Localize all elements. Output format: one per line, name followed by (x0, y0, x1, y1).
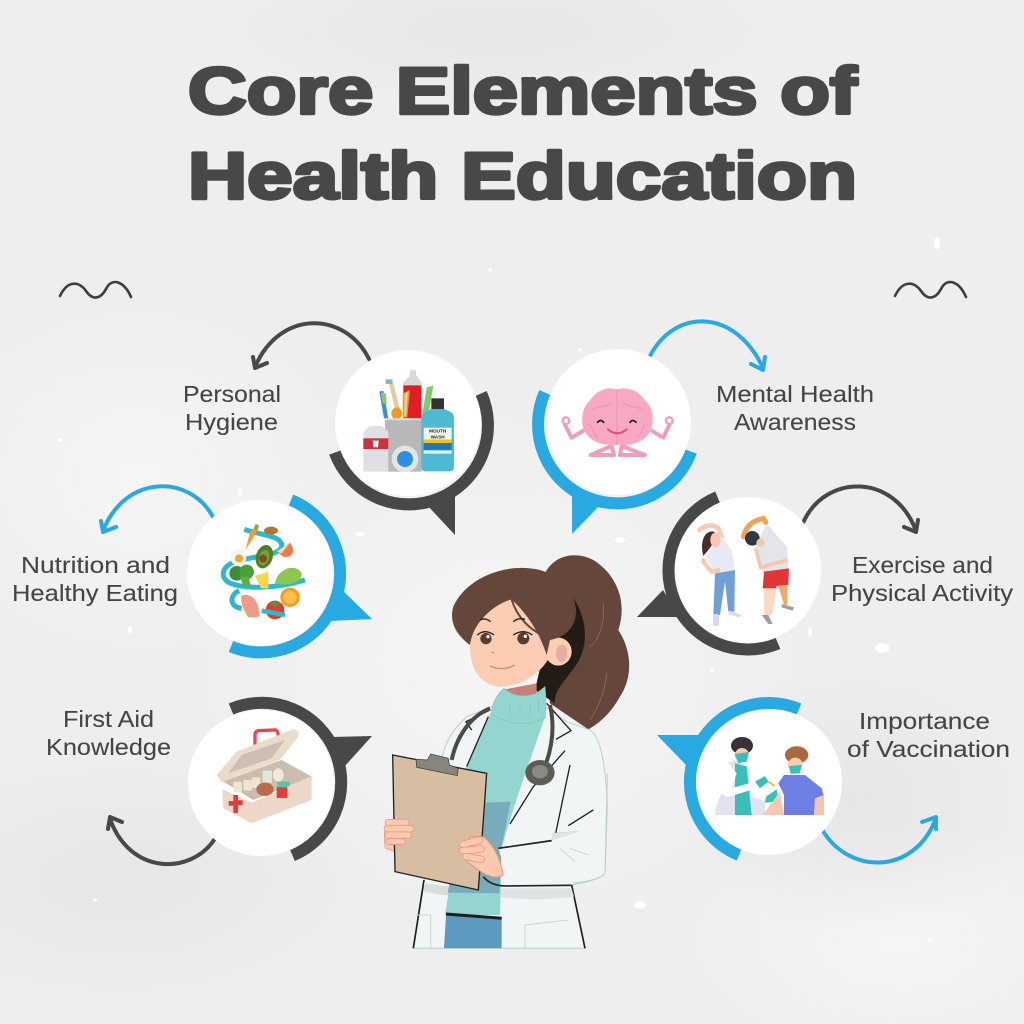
labels: Importance (859, 708, 990, 734)
arrow: personal hygiene (253, 323, 369, 368)
icon: meditating brain (563, 388, 673, 455)
labels: Healthy Eating (12, 580, 178, 606)
arrow: mental health (650, 321, 765, 370)
icon: first aid kit (217, 729, 312, 823)
icon: healthy food (223, 524, 305, 619)
labels (12, 381, 1014, 762)
panel: mental health bubble (538, 349, 691, 534)
arrow: vaccination (823, 817, 936, 863)
ponytail (543, 555, 629, 729)
panel: first aid bubble (188, 703, 372, 856)
panel: vaccination bubble (657, 703, 842, 855)
face (470, 598, 553, 687)
icon: hygiene products: WASH (431, 434, 445, 439)
coat lapels (502, 703, 593, 848)
labels: Exercise and (852, 552, 993, 578)
title (188, 53, 858, 212)
labels: Nutrition and (21, 552, 170, 578)
arrow: first aid (108, 817, 214, 864)
labels: Mental Health (716, 381, 874, 407)
icon: stretching people (699, 518, 794, 626)
labels: of Vaccination (847, 736, 1010, 762)
labels: Personal (183, 381, 281, 407)
labels: Awareness (734, 409, 856, 435)
hand right (467, 837, 503, 877)
fingers left (384, 819, 414, 845)
doctor illustration (384, 555, 629, 948)
turtleneck and neck (502, 683, 537, 700)
icon: hygiene products (363, 371, 454, 472)
icon: vaccination (715, 737, 824, 815)
coat shadow (424, 883, 500, 898)
hand left (384, 820, 395, 852)
pants (444, 915, 502, 948)
panel: personal hygiene bubble (335, 350, 488, 535)
arrow: nutrition (101, 486, 213, 532)
title: Core Elements of (188, 53, 858, 127)
icon: hygiene products: MOUTH (429, 429, 447, 434)
decorative wave left (60, 282, 131, 298)
labels: Physical Activity (831, 580, 1014, 606)
hair front (452, 568, 576, 655)
arrow: exercise (803, 486, 918, 532)
labels: First Aid (63, 706, 154, 732)
sleeve (498, 823, 605, 883)
stethoscope (452, 705, 552, 762)
decorative wave right (895, 282, 966, 298)
coat (413, 707, 607, 948)
clipboard (393, 755, 487, 890)
labels: Hygiene (185, 409, 278, 435)
labels: Knowledge (46, 734, 171, 760)
panel: exercise bubble (637, 497, 821, 650)
panel: nutrition bubble (187, 500, 372, 652)
eyes and mouth (480, 633, 492, 644)
sweater (445, 713, 546, 915)
title: Health Education (188, 138, 857, 212)
